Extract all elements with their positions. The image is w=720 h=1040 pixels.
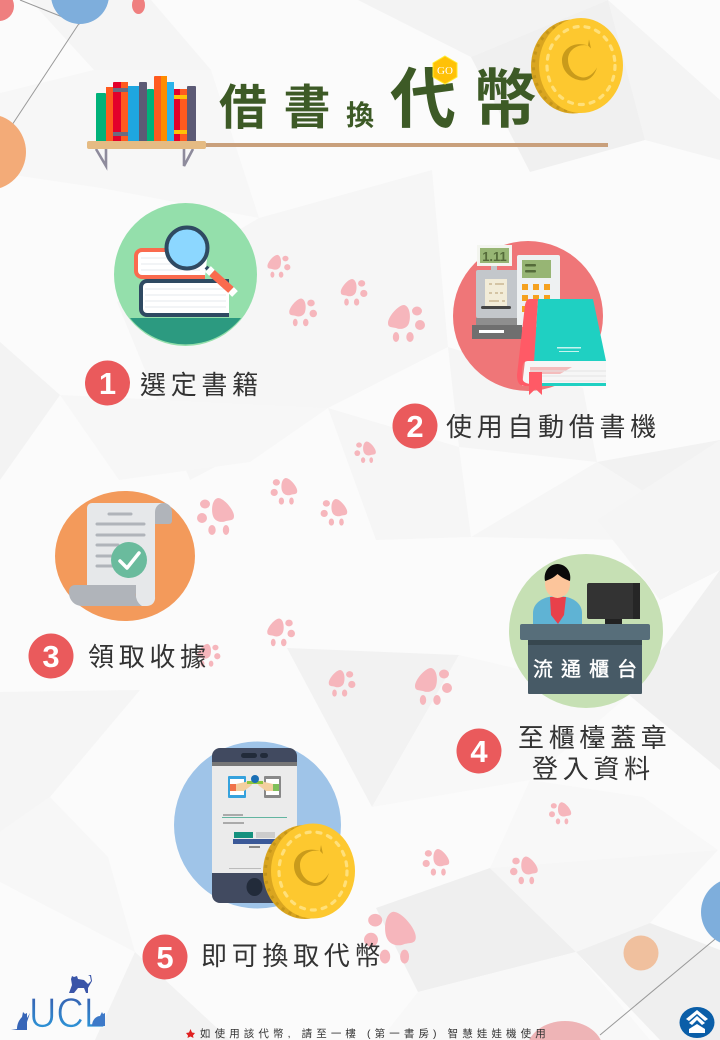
step 5 label: 5 bbox=[156, 940, 174, 975]
icon: step 5 coin bbox=[263, 824, 355, 919]
icon: bookshelf with books bbox=[87, 76, 608, 166]
step 2 icon: self-checkout machine and book: 1.11 bbox=[482, 249, 507, 264]
title bbox=[219, 56, 537, 136]
title: 借 bbox=[219, 82, 267, 135]
step 2 label: 使用自動借書機 bbox=[446, 412, 661, 442]
title: 書 bbox=[284, 81, 330, 134]
title: 換 bbox=[346, 100, 374, 131]
title: 代 bbox=[390, 62, 456, 136]
step 4 label bbox=[456, 723, 672, 784]
step 4 label: 至櫃檯蓋章 bbox=[518, 723, 672, 753]
step 1 label: 選定書籍 bbox=[140, 370, 263, 400]
step 1 icon: books and magnifier bbox=[114, 203, 257, 346]
icon: GO hexagon badge bbox=[433, 56, 457, 84]
logo: UCL with cats bbox=[11, 975, 105, 1036]
title: 幣 bbox=[473, 64, 537, 136]
step 3 icon: receipt with check bbox=[55, 491, 195, 621]
step 3 label: 3 bbox=[42, 639, 60, 674]
step 1 label: 1 bbox=[99, 366, 116, 401]
logo: university emblem bbox=[680, 1007, 714, 1038]
icon: title coin bbox=[531, 18, 623, 114]
step 5 label bbox=[142, 934, 385, 980]
footer note: 如使用該代幣, 請至一樓 (第一書房) 智慧娃娃機使用 bbox=[200, 1027, 550, 1040]
paw prints bbox=[197, 255, 571, 964]
icon: GO hexagon badge: GO bbox=[437, 65, 453, 77]
step 4 icon: circulation desk bbox=[509, 554, 663, 708]
step 4 label: 登入資料 bbox=[532, 754, 655, 784]
step 1 label bbox=[85, 360, 263, 406]
step 3 label: 領取收據 bbox=[88, 642, 211, 672]
step 5 icon: phone app bbox=[174, 742, 341, 908]
logo: UCL with cats: UCL bbox=[29, 989, 105, 1036]
step 3 label bbox=[28, 634, 211, 678]
step 5 label: 即可換取代幣 bbox=[201, 941, 385, 971]
step 4 label: 4 bbox=[470, 734, 488, 769]
step 2 label: 2 bbox=[406, 409, 424, 444]
step 4 icon: circulation desk: 流通櫃台 bbox=[533, 658, 645, 681]
step 2 label bbox=[392, 404, 661, 448]
step 2 icon: self-checkout machine and book bbox=[453, 241, 606, 395]
